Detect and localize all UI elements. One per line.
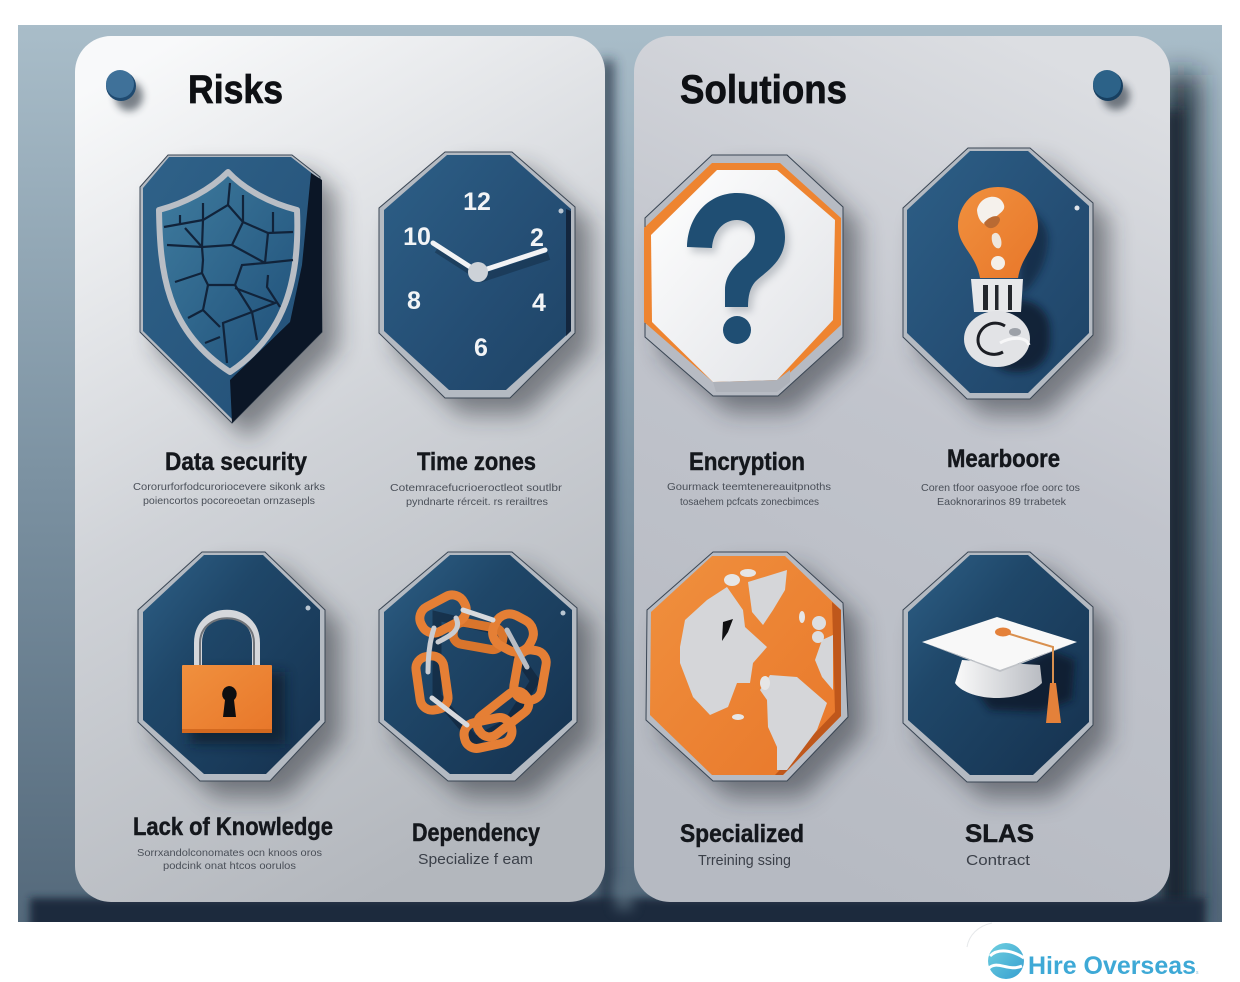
description: time zones: Cotemracefucrioeroctleot soutlbr (390, 482, 563, 494)
subtitle: slas: Contract (966, 852, 1031, 869)
description: encryption: tosaehem pcfcats zonecbimces (680, 496, 819, 508)
title: data security: Data security (165, 448, 307, 476)
logo wordmark: Hire Overseas (1028, 952, 1196, 980)
risks card (75, 36, 605, 902)
card: slas (903, 552, 1109, 869)
description: data security: Cororurforfodcuroriocevere sikonk arks (133, 481, 325, 493)
card: dependency (379, 552, 593, 868)
card: mearboore (903, 148, 1109, 508)
description: mearboore (921, 482, 1080, 508)
description: time zones (390, 482, 563, 508)
title: lack of knowledge: Lack of Knowledge (133, 813, 333, 841)
description: data security: poiencortos pocoreoetan ornzasepls (143, 495, 315, 507)
risks heading: Risks (188, 68, 283, 112)
logo: hire overseas: s (1196, 970, 1199, 976)
title: encryption: Encryption (689, 448, 805, 476)
title: slas: SLAS (965, 820, 1034, 848)
icon: chain (379, 552, 593, 797)
card: lack of knowledge (133, 552, 341, 872)
solutions card (634, 36, 1170, 902)
card: data security (133, 155, 338, 507)
icon: clock: 12 (463, 188, 491, 216)
icon: clock: 10 (403, 223, 431, 251)
panel: risks (75, 36, 605, 902)
title: specialized: Specialized (680, 820, 804, 848)
icon: clock: 2 (530, 224, 544, 252)
subtitle: specialized: Trreining ssing (698, 852, 791, 869)
card: time zones (379, 152, 591, 508)
card: encryption (644, 155, 859, 508)
description: mearboore: Eaoknorarinos 89 trrabetek (937, 496, 1067, 508)
description: lack of knowledge: Sorrxandolconomates ocn knoos oros (137, 847, 322, 859)
logo: hire overseas (967, 923, 1199, 980)
title: mearboore: Mearboore (947, 445, 1060, 473)
icon: clock: 4 (532, 289, 546, 317)
panel: solutions (634, 36, 1170, 902)
icon: graduation cap (903, 552, 1109, 798)
icon: light bulb (903, 148, 1109, 415)
solutions heading: Solutions (680, 68, 847, 112)
risks pin (106, 70, 143, 111)
icon: shield (140, 155, 338, 439)
title: time zones: Time zones (417, 448, 536, 476)
icon: question mark (644, 155, 859, 412)
icon: padlock (138, 552, 341, 797)
icon: clock: 6 (474, 334, 488, 362)
description: lack of knowledge: podcink onat htcos oorulos (163, 860, 296, 872)
description: encryption: Gourmack teemtenereauitpnoths (667, 481, 831, 493)
logo mark (988, 943, 1024, 979)
icon: clock: 8 (407, 287, 421, 315)
card: specialized (646, 552, 864, 869)
description: encryption (667, 481, 831, 508)
subtitle: dependency: Specialize f eam (418, 851, 533, 868)
description: time zones: pyndnarte rérceit. rs rerailtres (406, 496, 548, 508)
title: dependency: Dependency (412, 819, 540, 847)
description: lack of knowledge (137, 847, 322, 872)
description: mearboore: Coren tfoor oasyooe rfoe oorc tos (921, 482, 1080, 494)
icon: clock (379, 152, 591, 414)
icon: globe (646, 552, 864, 797)
solutions pin (1093, 70, 1130, 110)
description: data security (133, 481, 325, 507)
